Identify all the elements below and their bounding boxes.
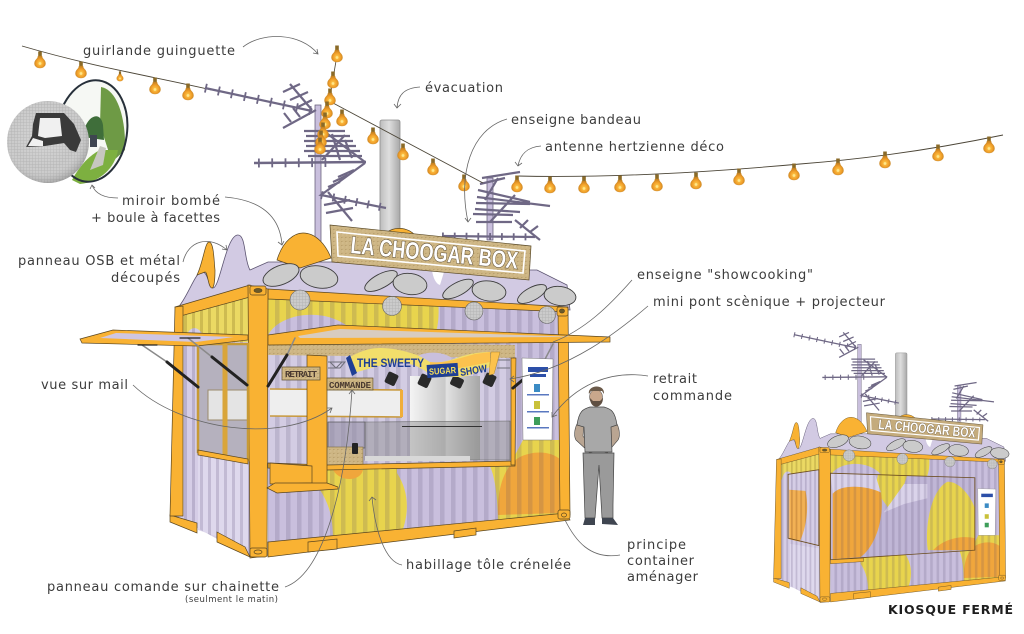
label retrait commande: commande (653, 389, 732, 404)
showcooking banner: SHOW (459, 363, 488, 379)
closed kiosk (774, 332, 1013, 617)
kiosk opening interior (267, 341, 516, 493)
OSB ceiling band (268, 341, 515, 358)
convex mirror (50, 76, 134, 186)
label principe container: principe (627, 538, 686, 553)
left awning (80, 330, 248, 346)
label principe container: aménager (627, 570, 699, 585)
label antenne: antenne hertzienne déco (545, 140, 724, 155)
showcooking banner (346, 348, 500, 379)
gas struts (138, 338, 553, 388)
label enseigne bandeau: enseigne bandeau (511, 113, 641, 128)
label principe container (627, 538, 699, 585)
stainless tube (410, 376, 480, 460)
poster (978, 489, 996, 535)
retrait sign (282, 367, 320, 380)
t-shirt (577, 407, 617, 452)
head and beard (589, 386, 604, 407)
label miroir (91, 194, 220, 226)
label panneau commande: (seulment le matin) (185, 595, 278, 605)
annotations (18, 44, 886, 605)
label retrait commande: retrait (653, 372, 697, 387)
container shell with corrugated cladding (170, 285, 570, 558)
front shutter (830, 473, 975, 564)
person for scale (575, 386, 619, 525)
retrait sign: RETRAIT (285, 370, 318, 380)
label panneau commande (47, 580, 279, 605)
sign board (330, 225, 531, 280)
info poster (522, 358, 553, 440)
mirror and disco ball (7, 76, 134, 186)
label panneau OSB: panneau OSB et métal (18, 254, 180, 269)
label principe container: container (627, 554, 695, 569)
lower frame (268, 461, 515, 470)
glass counter (328, 421, 510, 461)
label enseigne showcooking: enseigne "showcooking" (637, 268, 813, 283)
pick-up shelf (267, 483, 338, 493)
sign board: LA CHOOGAR BOX (349, 232, 519, 275)
label panneau OSB (18, 254, 180, 286)
label panneau OSB: découpés (111, 271, 180, 286)
showcooking banner: SUGAR (429, 365, 457, 377)
closed kiosk structure (774, 332, 1010, 603)
orange blob below counter (333, 470, 363, 479)
label vue sur mail: vue sur mail (41, 378, 128, 393)
garland left and top (22, 46, 212, 100)
commande sign: COMMANDE (329, 381, 372, 391)
pick-up column (307, 355, 327, 486)
chimney, antennas and cut-out roof panels (178, 84, 570, 312)
card reader (352, 443, 358, 454)
label miroir: miroir bombé (122, 194, 220, 209)
closed sign (866, 413, 983, 444)
projectors (384, 371, 497, 389)
pod lamps and mirror balls (260, 259, 577, 324)
garland right and hanging bulbs (314, 46, 1003, 193)
left shutter (788, 470, 819, 546)
stage truss (328, 360, 510, 368)
main kiosk (80, 84, 610, 558)
white back panel (270, 389, 403, 417)
leader lines (90, 37, 648, 587)
showcooking banner: THE SWEETY (357, 356, 424, 370)
legs (583, 453, 614, 518)
bulbs left (34, 52, 194, 100)
disco ball (7, 101, 89, 183)
right awning (268, 325, 610, 345)
bulbs (314, 46, 994, 193)
label guirlande: guirlande guinguette (83, 44, 235, 59)
left window (198, 344, 248, 464)
label retrait commande (653, 372, 732, 404)
shoes (583, 518, 618, 525)
label mini pont: mini pont scènique + projecteur (653, 295, 886, 310)
closed kiosk caption: KIOSQUE FERMÉ (888, 602, 1013, 617)
label habillage: habillage tôle crénelée (406, 558, 571, 573)
arms (575, 424, 619, 453)
closed sign: LA CHOOGAR BOX (878, 417, 977, 441)
label evacuation: évacuation (425, 81, 503, 96)
step (270, 463, 312, 484)
OSB till counter (326, 447, 363, 468)
label panneau commande: panneau comande sur chainette (47, 580, 279, 595)
label miroir: + boule à facettes (91, 211, 220, 226)
